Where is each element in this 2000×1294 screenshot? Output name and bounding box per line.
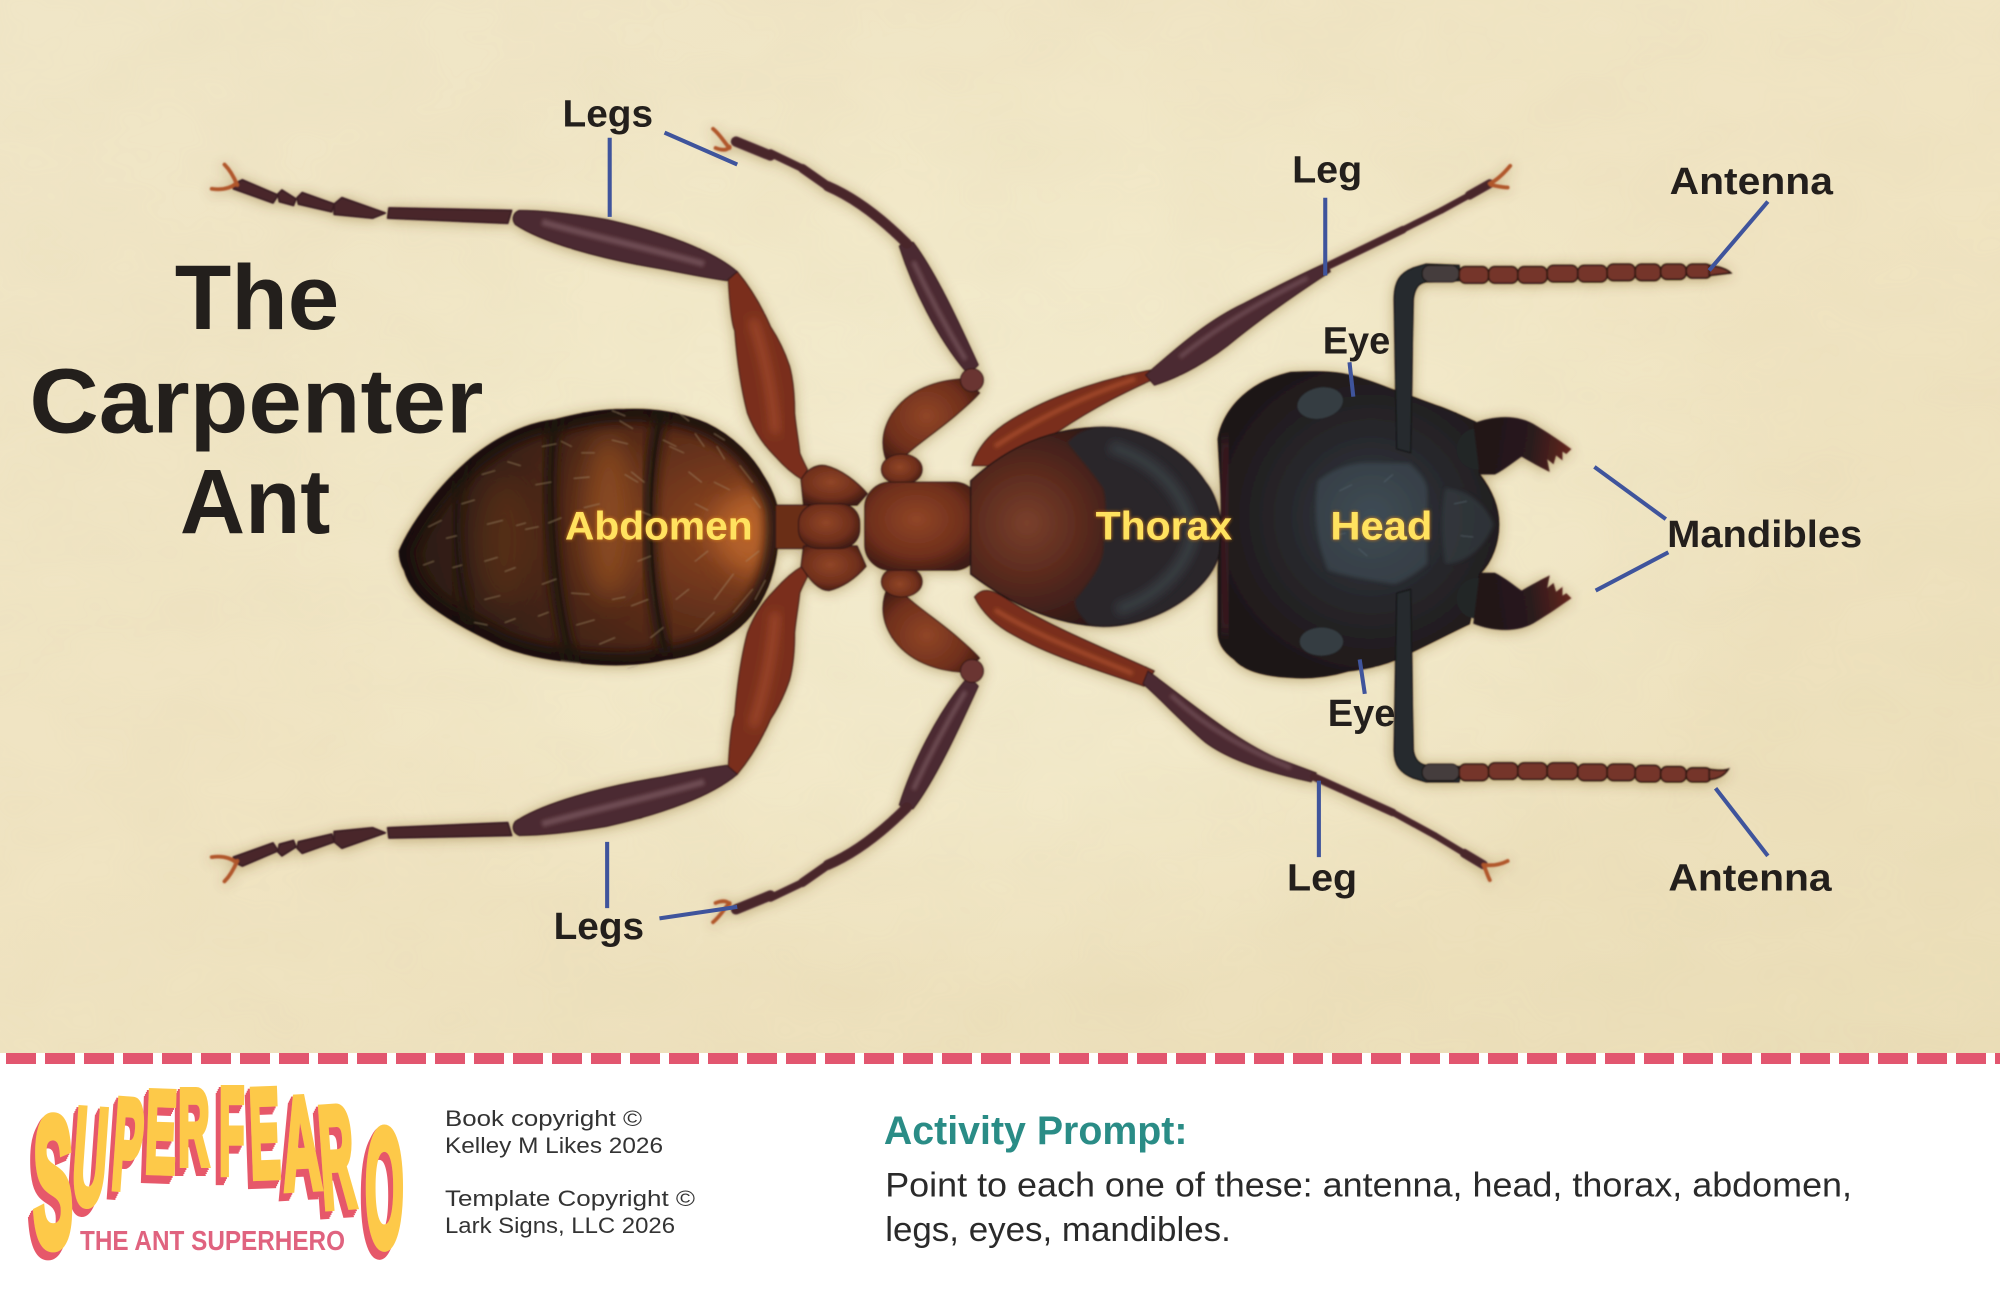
callout labels: Leg: [1292, 148, 1362, 191]
callout labels: Antenna: [1670, 160, 1834, 203]
copyright text: [445, 1106, 695, 1238]
abdomen hairs: [423, 411, 765, 668]
activity prompt text: Point to each one of these: antenna, head, thorax, abdomen,: [885, 1166, 1852, 1204]
copyright text: Template Copyright ©: [445, 1186, 695, 1211]
logo wordmark: U: [68, 1079, 113, 1235]
logo wordmark: E: [247, 1063, 283, 1206]
antenna, lower: [1394, 589, 1728, 782]
rear leg, lower: [212, 566, 807, 881]
copyright text: Lark Signs, LLC 2026: [445, 1213, 675, 1238]
head plate: [1316, 463, 1427, 584]
antenna, upper: [1394, 264, 1731, 453]
illustration: carpenter ant: [212, 129, 1731, 922]
rear leg, upper: [212, 165, 807, 480]
eye, upper: [1295, 383, 1346, 423]
logo wordmark: E: [143, 1067, 179, 1199]
logo: Super Fearo: [33, 1061, 404, 1286]
logo wordmark: R: [314, 1074, 360, 1239]
head: [1218, 372, 1571, 678]
callout lines: [607, 133, 1768, 918]
activity prompt text: legs, eyes, mandibles.: [885, 1211, 1231, 1249]
logo wordmark: [33, 1061, 404, 1286]
activity prompt text: [885, 1166, 1852, 1249]
copyright text: Book copyright ©: [445, 1106, 642, 1131]
logo wordmark: P: [108, 1071, 148, 1218]
title: Ant: [180, 451, 330, 553]
copyright text: Kelley M Likes 2026: [445, 1133, 663, 1158]
mandible, lower: [1457, 573, 1571, 630]
mandible, upper: [1457, 417, 1571, 474]
head side plate: [1442, 489, 1494, 564]
thorax: [971, 427, 1222, 626]
body part labels: [565, 505, 1432, 549]
logo wordmark: O: [365, 1096, 404, 1283]
petiole and waist nodes: [776, 465, 980, 591]
callout labels: Legs: [563, 92, 653, 135]
title: Carpenter: [29, 350, 483, 452]
logo wordmark: A: [278, 1068, 324, 1219]
callout labels: Eye: [1328, 692, 1395, 735]
callout labels: Leg: [1287, 856, 1357, 899]
logo tagline: THE ANT SUPERHERO: [80, 1225, 345, 1256]
logo wordmark: S: [33, 1081, 73, 1286]
divider: dashed pink line: [0, 1053, 2000, 1064]
front leg, lower: [974, 590, 1508, 880]
body part labels: Thorax: [1096, 505, 1232, 549]
callout labels: Antenna: [1668, 856, 1832, 899]
activity prompt heading: Activity Prompt:: [884, 1109, 1187, 1153]
logo wordmark: F: [219, 1061, 245, 1201]
title: [29, 247, 483, 553]
callout labels: Eye: [1323, 319, 1390, 362]
body part labels: Abdomen: [565, 505, 753, 549]
callout labels: Legs: [554, 905, 644, 948]
callout labels: Mandibles: [1667, 513, 1862, 556]
abdomen: [399, 409, 781, 668]
middle leg, upper: [713, 129, 983, 485]
callout labels: [554, 92, 1862, 948]
body part labels: Head: [1330, 505, 1432, 549]
middle leg, lower: [713, 566, 983, 922]
front leg, upper: [972, 166, 1510, 466]
head texture marks: [1333, 474, 1473, 556]
eye, lower: [1300, 628, 1343, 656]
title: The: [175, 247, 339, 349]
logo wordmark: R: [178, 1065, 210, 1189]
